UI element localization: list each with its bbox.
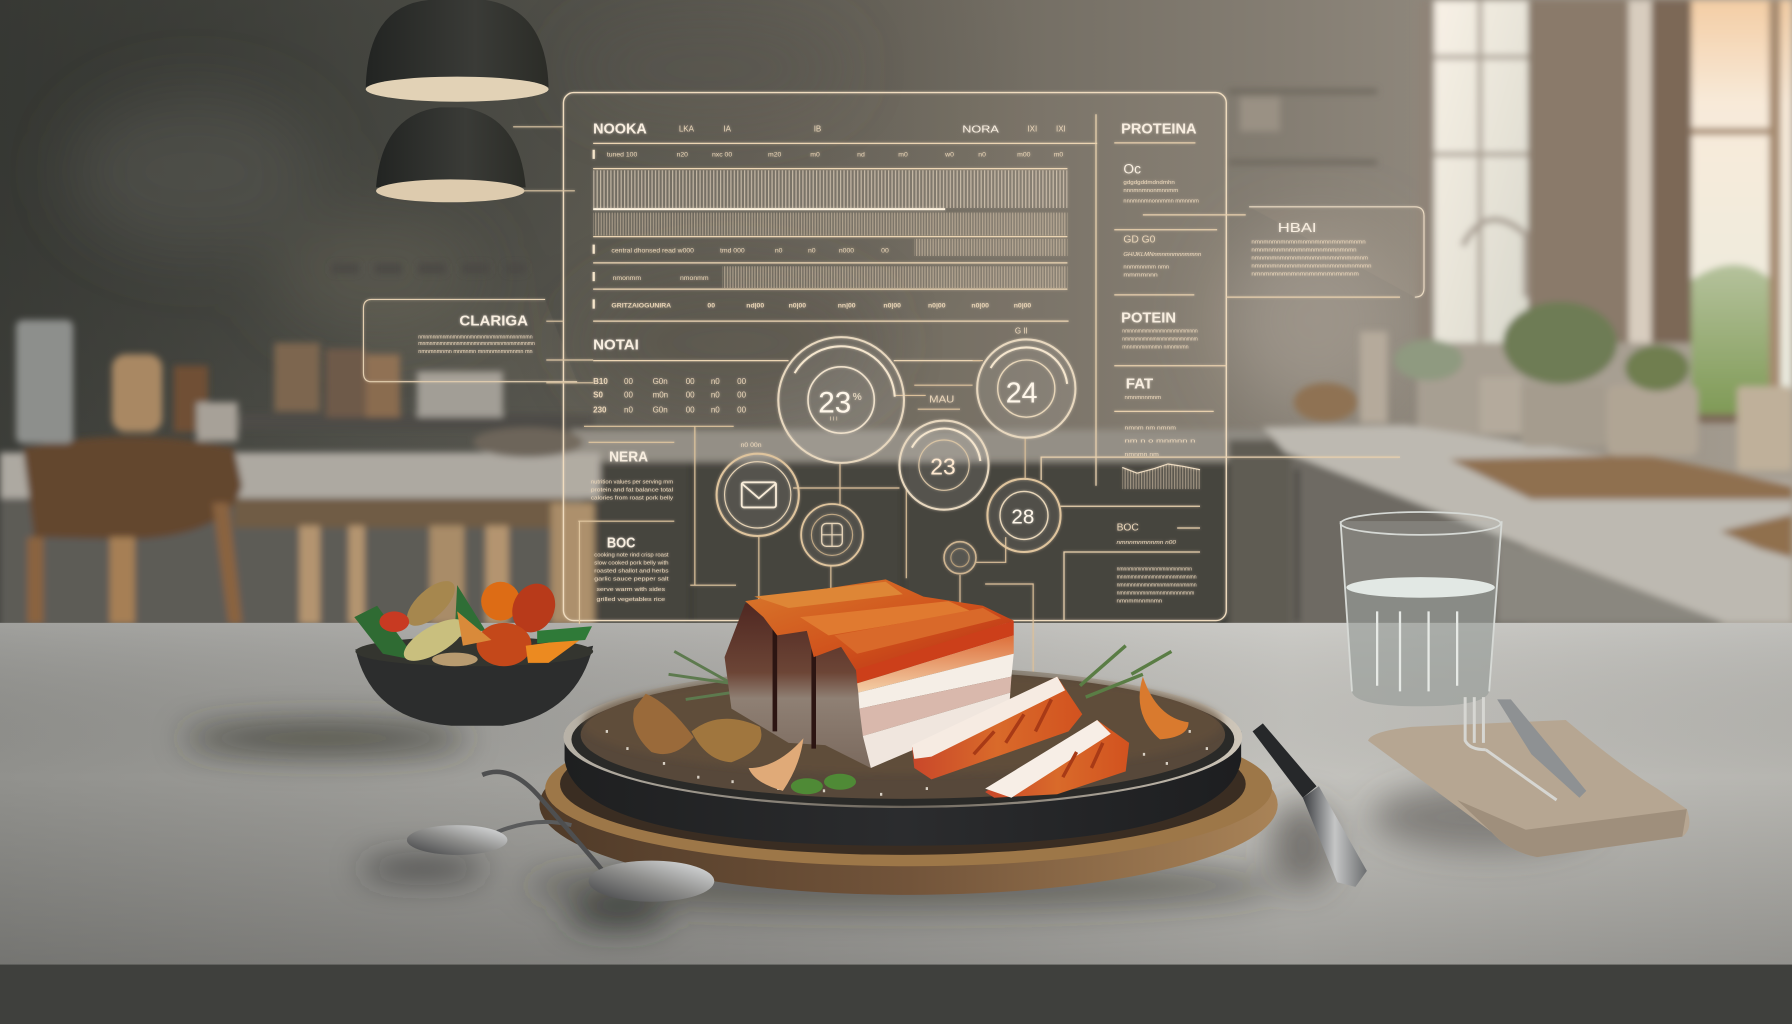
background chair: [23, 437, 242, 624]
column: boc: nmnmmnnmnmn: [1117, 598, 1162, 604]
column: proteina: PROTEINA: [1121, 122, 1197, 138]
table knife: [1253, 723, 1367, 887]
gauge: 23: 23: [930, 453, 956, 479]
gauge: 23: [894, 415, 994, 515]
text block: boc: roasted shallot and herbs: [594, 569, 669, 575]
column: proteina: [1121, 122, 1199, 204]
bar row labels: tmd 000: [720, 248, 745, 255]
table shadows: [183, 722, 1600, 928]
cutting board: [1449, 455, 1792, 499]
heading: notai: NOTAI: [593, 338, 639, 354]
panel heading row: NORA: [962, 125, 999, 136]
right countertop: [1263, 425, 1792, 623]
panel frame: [563, 93, 1226, 621]
callout: hbai: nmnmnmnmnmnmnmnmnmnmnmnmnmn: [1251, 239, 1366, 245]
block front cut face: [856, 621, 1014, 768]
callout: hbai: nmnmnmnmnmnmnmnmnmnmnmnmnmnmn: [1251, 263, 1371, 269]
panel heading row: IB: [814, 124, 821, 133]
gauge: 28: 28: [1011, 505, 1034, 528]
right column divider and rules: [1041, 114, 1400, 621]
lamp: upper: [366, 0, 549, 102]
block top crackling: [745, 579, 1014, 672]
bar row labels: nn|00: [838, 302, 856, 309]
bar row labels: nmonmm: [680, 275, 709, 282]
mini chart: nmnmn nm: [1125, 452, 1159, 458]
callout: clariga: mnmnmnmnmnnnmnmnmnmnmnmnmnmmnmnmn: [418, 341, 535, 347]
gauge: 23 percent: %: [853, 392, 862, 403]
text block: boc: slow cooked pork belly with: [594, 561, 669, 567]
column: potein: mnnmnmnmnmn nmnmnmn: [1122, 345, 1189, 351]
values table: 00: [686, 391, 695, 400]
column: boc: nmnnmnmnmnmnmmnnmnmnmn: [1117, 566, 1192, 572]
column: proteina: Oc: [1123, 162, 1141, 177]
column: boc: nmnmmnnmnmnmnmnmnnnmnm: [1117, 590, 1195, 596]
callout: hbai: nmnmnmnmnmnmnmnmnmnmnmnmn: [1251, 247, 1357, 253]
small table row: nd: [857, 152, 865, 159]
napkin: [1368, 720, 1689, 857]
spoon one: [407, 822, 571, 855]
callout: clariga: CLARIGA: [459, 314, 528, 330]
table surface: [0, 623, 1792, 1024]
callout: clariga: [363, 127, 593, 383]
small table row: m00: [1017, 152, 1031, 159]
callout: hbai: nmnmnmnmnmnmnmnmnmnmnmnmnmnm: [1251, 255, 1368, 261]
bar row labels: n0|00: [971, 302, 989, 309]
bar row labels: [611, 248, 1031, 309]
gauge: mail icon: [717, 442, 799, 536]
callout: hbai: [1249, 207, 1424, 297]
column: gd block: GHIJKLMNnmnmnmnnmmnn: [1123, 252, 1201, 258]
gauge: mail icon: n0 00n: [741, 442, 762, 449]
mini chart: [1122, 426, 1200, 489]
gauge: 24: [970, 327, 1082, 445]
values table: n0: [711, 391, 720, 400]
block dark sides: [725, 594, 871, 768]
background bottles and jars: [16, 269, 526, 443]
panel heading row: IXI: [1056, 124, 1066, 133]
bowl: [355, 646, 593, 726]
values table: G0n: [653, 377, 668, 386]
bar row labels: n000: [839, 248, 854, 255]
heading: boc: BOC: [607, 535, 636, 551]
values table: 00: [737, 391, 747, 400]
pork slices: [912, 677, 1129, 798]
column: boc: BOC: [1117, 522, 1139, 533]
background left table and shelf: [0, 414, 600, 624]
values table: 00: [624, 391, 633, 400]
bar row labels: n0|00: [1014, 302, 1031, 309]
small table row: m0: [1054, 152, 1063, 159]
water glass: [1341, 512, 1502, 706]
text block: boc: cooking note rind crisp roast: [594, 553, 669, 559]
column: potein: [1121, 310, 1198, 351]
callout: clariga: nmnmnnmnmnmnmnnmnmnmnmnmnmnnnmnmn: [418, 334, 533, 340]
panel heading row: NOOKA: [593, 122, 647, 138]
bar row labels: n0|00: [883, 302, 901, 309]
mini chart: nm n o mnmnn n: [1125, 438, 1195, 444]
small table row: m0: [810, 152, 820, 159]
window right: [1629, 0, 1792, 423]
values table: n0: [711, 377, 720, 386]
values table: m0n: [653, 391, 668, 400]
wooden board: [539, 711, 1278, 895]
bar row labels: n0|00: [928, 302, 946, 309]
connector lines: [759, 361, 1033, 674]
bar row labels: GRITZAIOGUNIRA: [611, 302, 671, 309]
vegetable bowl: [354, 573, 593, 726]
text block: hera: [591, 479, 673, 501]
column: fat: nmnmnnmnm: [1125, 395, 1161, 401]
column: boc: nmnnmnmnnmn n00: [1117, 540, 1177, 546]
values table: 00: [624, 377, 633, 386]
bar row labels: nd|00: [746, 302, 764, 309]
column: fat: [1125, 377, 1161, 401]
text block: hera: protein and fat balance total: [591, 487, 673, 493]
heading: hera: NERA: [609, 450, 648, 466]
row markers: [593, 150, 595, 309]
values table: n0: [711, 406, 720, 415]
lower cabinets: [0, 440, 1726, 629]
gauge: 23 percent: 23: [818, 387, 851, 420]
table front edge: [0, 965, 1792, 1024]
values table: 00: [686, 377, 695, 386]
panel heading row: [593, 122, 1066, 138]
values table: n0: [624, 406, 633, 415]
small table row: m20: [768, 152, 782, 159]
callout: hbai: HBAI: [1278, 221, 1317, 235]
roasted shallots and herbs: [633, 646, 1189, 794]
pepper specks: [606, 731, 1208, 794]
plant pots: [1394, 302, 1792, 471]
values table: 230: [593, 406, 607, 415]
column: boc: mnnmmnmnmnmnmnmnnmnmnmn: [1117, 574, 1197, 580]
column: proteina: gdgdgddmdndmhn: [1123, 180, 1175, 186]
text block: boc: serve warm with sides: [597, 587, 665, 593]
values table: [593, 377, 747, 415]
pendant lamps: [366, 0, 549, 202]
slice two: [985, 720, 1129, 798]
label: mau: MAU: [929, 394, 954, 405]
values table: S0: [593, 391, 603, 400]
text block: boc: [594, 553, 669, 603]
text block: hera: nutrition values per serving mm: [591, 479, 673, 485]
window left: [1417, 0, 1531, 354]
panel heading row: IA: [723, 124, 732, 133]
gauge: small dot: [944, 542, 976, 574]
small table row: nxc 00: [712, 152, 732, 159]
column: gd block: GD G0: [1123, 234, 1156, 245]
column: potein: POTEIN: [1121, 310, 1176, 326]
small table row: w0: [944, 152, 954, 159]
herb: rosemary left: [669, 651, 731, 699]
gauge: 23 percent: I I I: [830, 417, 838, 423]
vegetables: [354, 606, 417, 661]
values table: G0n: [653, 406, 668, 415]
values table: 00: [737, 377, 747, 386]
bar row labels: n0: [775, 248, 783, 255]
hatched bars chart: [593, 170, 1067, 288]
column: potein: nmnnnmmmnmnmnmnmnmmnnn: [1122, 329, 1198, 335]
bar row labels: n0: [808, 248, 816, 255]
text block: boc: garlic sauce pepper salt: [594, 577, 669, 583]
column: boc: nmnmnnmnmnmmnmnmnnnmnmn: [1117, 582, 1197, 588]
column: fat: FAT: [1126, 377, 1153, 393]
column: gd block: [1123, 234, 1201, 279]
dark plate: [563, 666, 1242, 846]
label: mau: [914, 385, 973, 409]
column: boc: [1117, 522, 1197, 604]
panel heading row: LKA: [679, 124, 695, 133]
sauce: [581, 671, 1225, 799]
holographic nutrition panel: [563, 93, 1400, 674]
right lower wall: [1417, 343, 1691, 434]
panel heading row: IXI: [1027, 124, 1037, 133]
column: gd block: mmmmnnn: [1123, 273, 1158, 279]
spoon two: [482, 772, 714, 902]
wall pillar: [1529, 0, 1630, 343]
gauge: table icon: [801, 504, 863, 566]
roast pork belly block: [669, 579, 1014, 768]
column: proteina: nnnmnmnonmnnmm: [1123, 188, 1179, 194]
gauge: 24: G II: [1015, 327, 1028, 336]
background counter objects: [1229, 91, 1387, 423]
column: proteina: nnnmnnmnonnmmn mmnnnm: [1123, 198, 1199, 204]
lamp: lower: [376, 107, 526, 202]
text block: boc: grilled vegetables rice: [597, 597, 665, 603]
counter band behind panel: [571, 430, 1269, 462]
small table row: m0: [898, 152, 908, 159]
small table row: n0: [978, 152, 986, 159]
values table: B10: [593, 377, 608, 386]
bar row labels: n0|00: [789, 302, 806, 309]
bar row labels: nmonmm: [613, 275, 641, 282]
slice one: [912, 677, 1082, 779]
gauge: 24: 24: [1006, 377, 1038, 409]
small table row: tuned 100: [607, 152, 637, 159]
values table: 00: [686, 406, 695, 415]
bar row labels: central dhonsed read w000: [611, 248, 694, 255]
column: gd block: nnmmnnmm nmn: [1123, 265, 1169, 271]
callout: clariga: nmnmnmnmn mnmnmn mnmnmnmnmnmn mn: [418, 349, 533, 355]
bar row labels: 00: [707, 302, 715, 309]
column: potein: nmmnmnmnnmnnmnmmnmnmnm: [1122, 337, 1198, 343]
mini chart: nmnm nm nmnm: [1125, 426, 1176, 432]
gauge: 28: [987, 479, 1061, 552]
values table: 00: [737, 406, 747, 415]
small table row: n20: [677, 152, 688, 159]
text block: hera: calories from roast pork belly: [591, 495, 673, 501]
fork and dinner knife: [1465, 697, 1586, 800]
spoons: [407, 772, 714, 902]
callout: hbai: nmnmnmnmnmnmnmnmnmnmnmnm: [1251, 271, 1359, 277]
bar row labels: 00: [881, 248, 889, 255]
gauge: 23 percent: [768, 327, 915, 473]
